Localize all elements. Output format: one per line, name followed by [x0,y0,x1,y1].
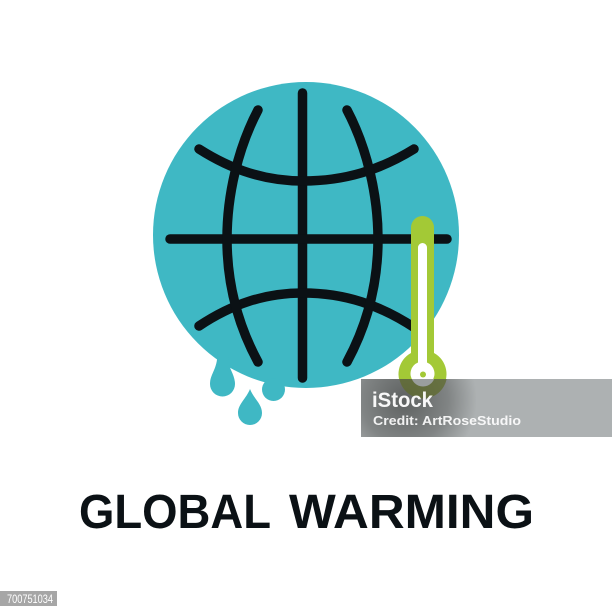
mercury tube [411,243,435,386]
thermometer body [398,216,446,398]
bulb dot [420,372,426,378]
central meridian [298,93,307,378]
tag number: 700751034 [7,592,53,606]
title: WARMING [289,486,534,539]
globe grid lines [170,93,447,378]
icon: thermometer [398,216,446,398]
watermark logo: iStock [372,389,433,412]
right meridian [347,110,378,362]
drop: left [210,350,235,396]
upper latitude [199,149,414,181]
title: GLOBAL [79,486,271,539]
banner shading [361,379,476,437]
globe disc [153,82,459,388]
drop: lower [238,389,262,425]
watermark banner [361,379,612,437]
equator [170,234,447,244]
left meridian [227,110,258,362]
water drops [210,350,285,425]
title [79,486,534,539]
icon: melting globe [153,82,459,425]
bulb seen through banner [400,379,446,398]
drop: right [262,378,285,401]
image id tag [0,591,57,606]
banner background [361,379,612,437]
lower latitude [199,293,415,328]
watermark credit: Credit: ArtRoseStudio [373,413,521,428]
tag background [0,591,57,606]
